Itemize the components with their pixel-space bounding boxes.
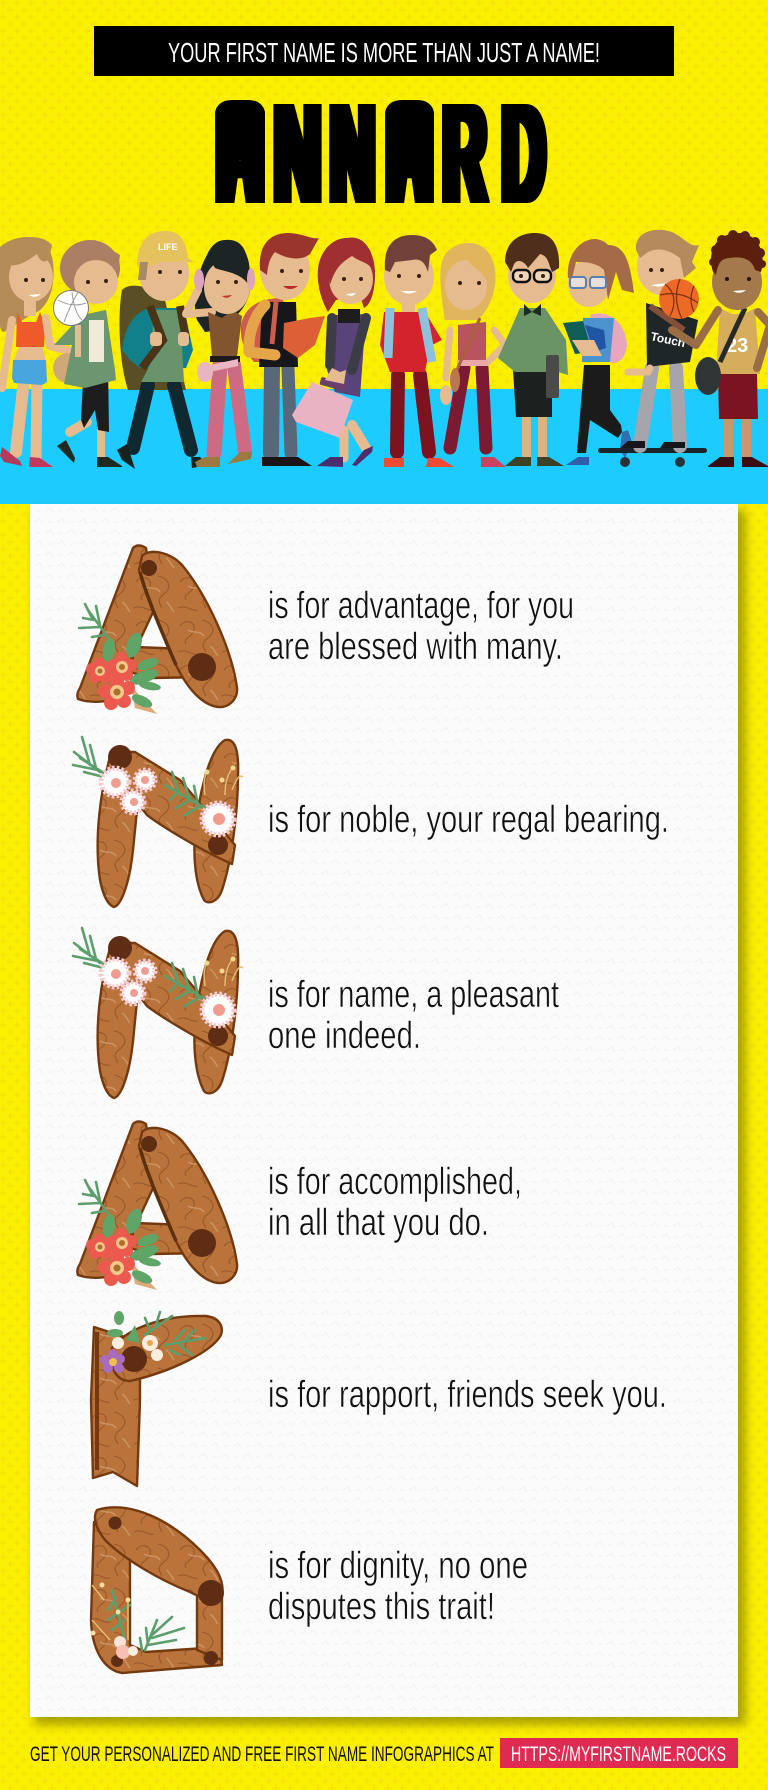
student: boy in red shirt (380, 235, 454, 467)
letter A text (268, 585, 574, 668)
student: girl with ponytail and tablet (563, 239, 634, 465)
white content panel (30, 504, 738, 1717)
cyan floor band (0, 389, 768, 504)
second letter N text: one indeed. (268, 1015, 421, 1057)
name title (215, 74, 545, 232)
letter D text (268, 1545, 528, 1628)
letter D text: disputes this trait! (268, 1586, 495, 1628)
name title: A (220, 74, 260, 232)
letter A text: are blessed with many. (268, 626, 563, 668)
wooden letter A second (77, 1122, 237, 1290)
student: boy on skateboard with basketball (598, 230, 707, 467)
wooden letter R (91, 1311, 222, 1486)
student: boy with backpack and cap: LIFE (158, 242, 178, 252)
student: boy with red hair and book (241, 233, 325, 466)
student: girl with red bob and pink bag (292, 238, 375, 467)
name title: N (274, 74, 321, 232)
student: girl with headphones (186, 240, 255, 467)
student: blonde girl (440, 243, 506, 467)
wooden letter N (73, 737, 243, 907)
letter D text: is for dignity, no one (268, 1545, 528, 1587)
name title: R (443, 74, 486, 232)
second letter A text: in all that you do. (268, 1202, 489, 1244)
group of students (0, 230, 768, 469)
student: boy with backpack and cap (117, 231, 208, 469)
student: girl with volleyball (53, 240, 122, 467)
footer call to action: GET YOUR PERSONALIZED AND FREE FIRST NAME INFOGRAPHICS AT (30, 1743, 494, 1766)
second letter N text (268, 974, 559, 1057)
name title: A (390, 74, 429, 232)
letter A text: is for advantage, for you (268, 585, 574, 627)
wooden letter D (90, 1507, 224, 1673)
infographic canvas: D (502, 74, 545, 232)
student: boy on skateboard with basketball: Touch (649, 329, 687, 350)
student: curly-haired boy with shoulder bag (672, 230, 768, 467)
student: boy with glasses and laptop (498, 233, 568, 466)
wooden letter A (77, 546, 237, 714)
top banner (94, 26, 674, 76)
wooden letter N second (73, 928, 243, 1098)
panel shadow (34, 510, 746, 1725)
student: curly-haired boy with shoulder bag: 23 (726, 335, 748, 357)
second letter N text: is for name, a pleasant (268, 974, 559, 1016)
student: girl in orange top (0, 237, 74, 467)
second letter A text: is for accomplished, (268, 1161, 522, 1203)
footer url button (500, 1738, 738, 1768)
second letter A text (268, 1161, 522, 1244)
name title: N (330, 74, 375, 232)
